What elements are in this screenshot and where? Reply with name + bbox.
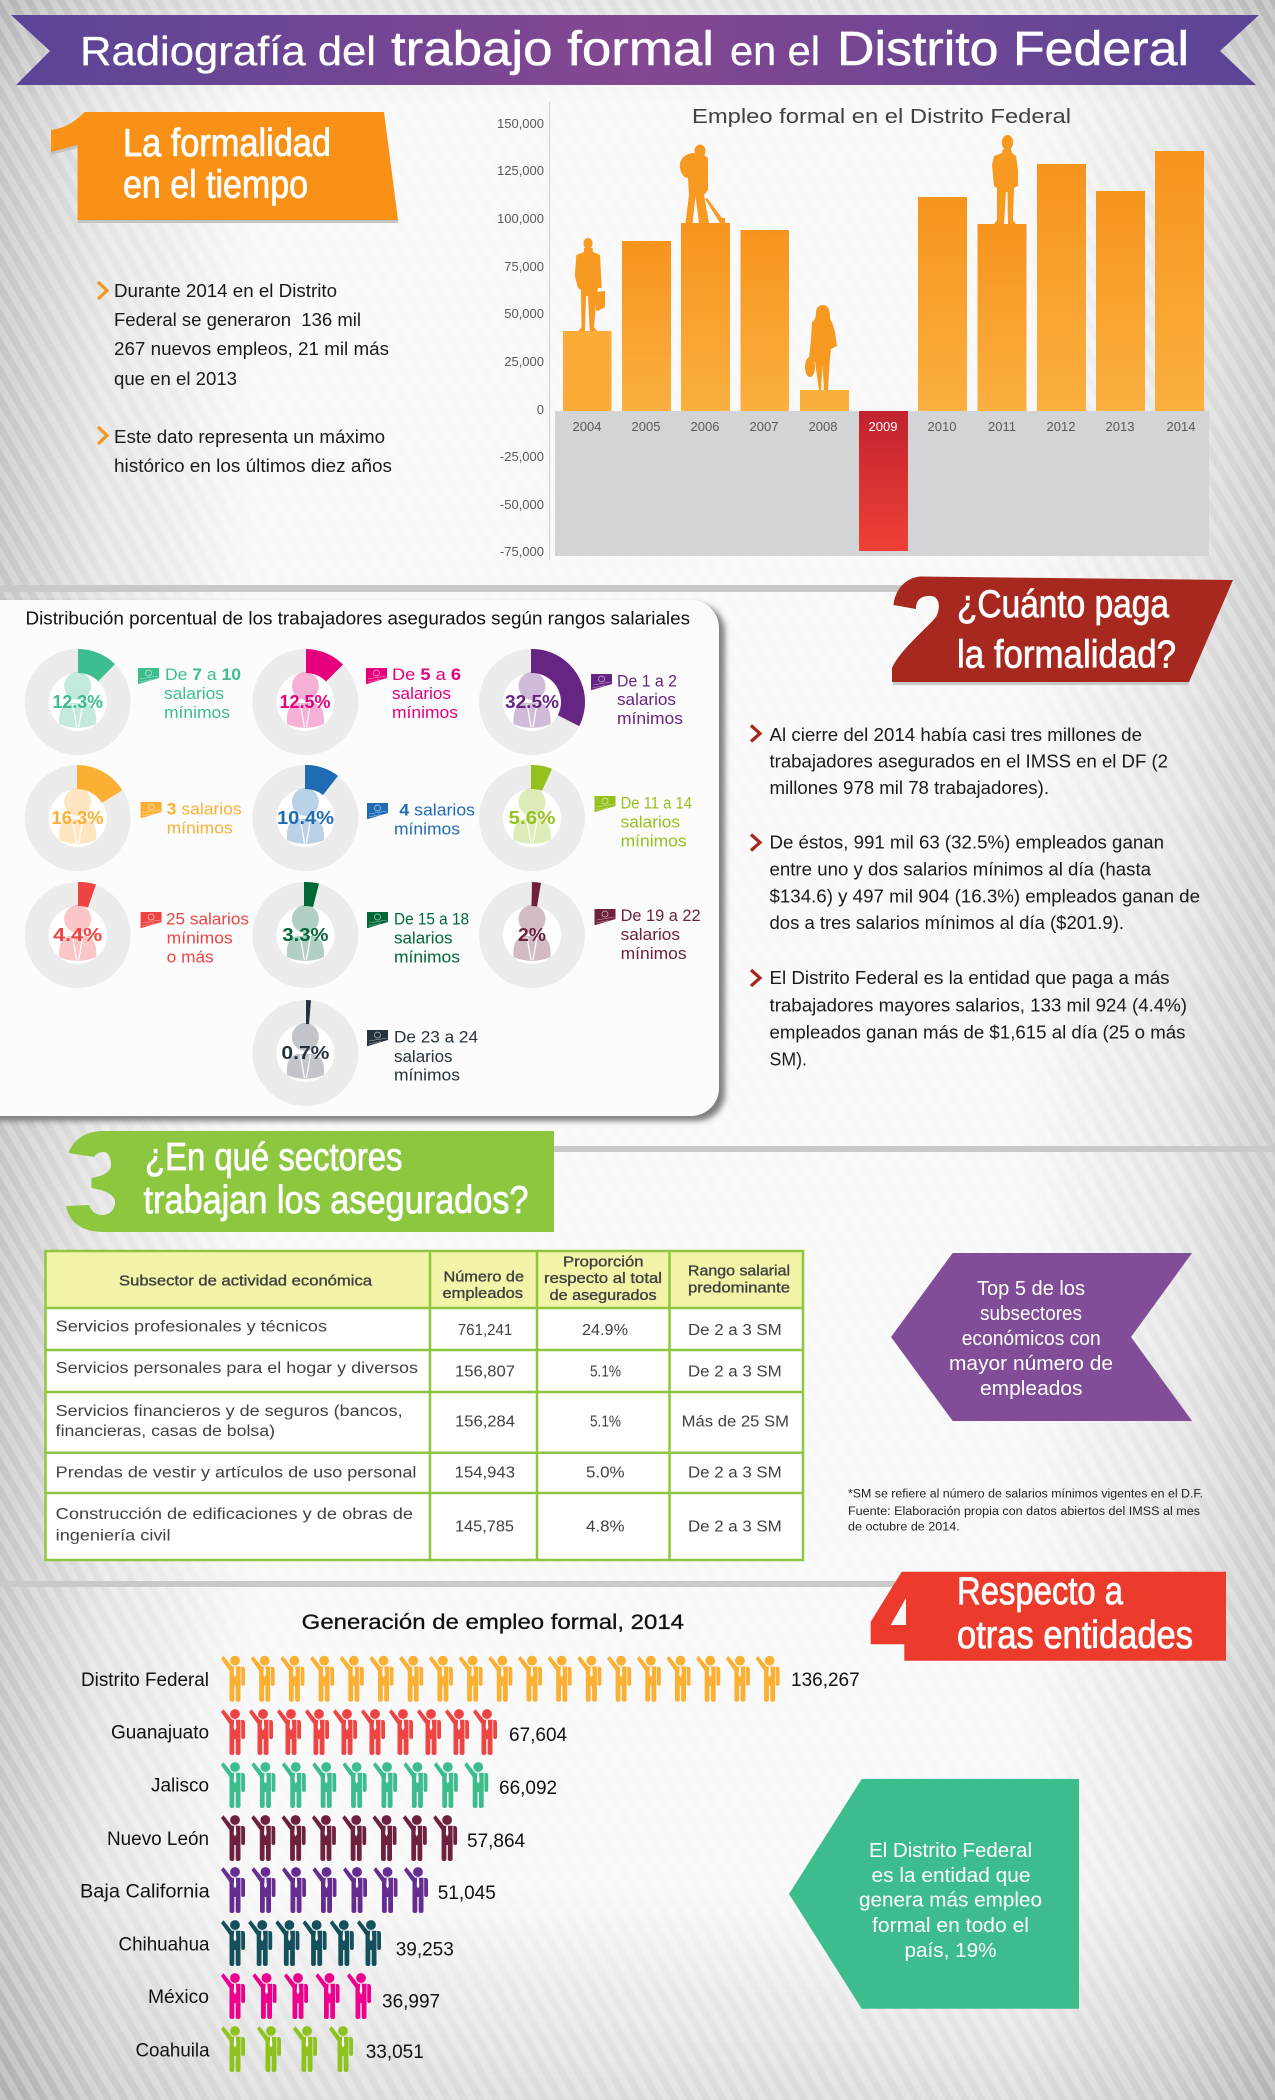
table rows: 5.0% (586, 1465, 625, 1482)
section 3 heading tag: ¿En qué sectores (145, 1136, 402, 1179)
donut: 16.3% 3 salarios (25, 765, 242, 871)
donut: 12.5% de 5 a 6: mínimos (392, 704, 458, 722)
y axis: 25,000 (504, 354, 544, 369)
donut: 10.4% 4 salarios: 4 salarios (399, 802, 475, 820)
table rows: 145,785 (455, 1519, 514, 1536)
row: Coahuila: Coahuila (136, 2041, 210, 2062)
callout: top 5 subsectores: económicos con (962, 1328, 1101, 1350)
title banner: trabajo formal (391, 23, 714, 76)
donut: 2% de 19 a 22: mínimos (621, 945, 687, 963)
section 4 heading tag: otras entidades (957, 1614, 1193, 1657)
table header: respecto al total (544, 1271, 662, 1287)
donut: 0.7% de 23 a 24 (252, 1000, 478, 1106)
section 1 heading tag: en el tiempo (123, 164, 308, 206)
donut: 5.6% de 11 a 14 (479, 765, 692, 871)
donut: 16.3% 3 salarios: mínimos (167, 820, 233, 838)
section 2 heading tag (892, 576, 1233, 685)
icon: young man silhouette (992, 135, 1018, 224)
table header: de asegurados (550, 1288, 657, 1304)
year labels: 2010 (928, 419, 956, 434)
donut: 3.3% de 15 a 18: mínimos (394, 949, 460, 967)
row: Chihuahua: 39,253 (396, 1940, 454, 1961)
y axis: 100,000 (497, 211, 544, 226)
year labels: 2004 (573, 419, 601, 434)
panel: distribución salarial (0, 600, 725, 1121)
donut: 12.3% de 7 a 10: De 7 a 10 (165, 666, 241, 684)
footnote (848, 1489, 1203, 1534)
donut: 12.5% de 5 a 6: De 5 a 6 (392, 666, 461, 684)
table header: empleados (442, 1286, 523, 1302)
table rows: 154,943 (455, 1465, 515, 1482)
title banner: en el (730, 28, 820, 74)
section 2 text block: trabajadores asegurados en el IMSS en el DF (2 (770, 752, 1168, 772)
donut: 4.4% 25 salarios o más: 4.4% (53, 925, 102, 945)
donut: 12.5% de 5 a 6 (252, 649, 461, 755)
divider line: section 3 (550, 1146, 1275, 1152)
donut: 5.6% de 11 a 14: De 11 a 14 (621, 795, 692, 813)
year labels: 2009 (869, 419, 897, 434)
table rows: De 2 a 3 SM (688, 1322, 782, 1339)
donut: 12.3% de 7 a 10: salarios (164, 685, 224, 703)
section 1 text block: Este dato representa un máximo (114, 427, 385, 447)
table rows: De 2 a 3 SM (688, 1465, 782, 1482)
donut: 2% de 19 a 22: salarios (621, 926, 680, 944)
table rows (56, 1319, 789, 1545)
table rows: 5.1% (590, 1364, 621, 1381)
table header (119, 1255, 790, 1304)
row: Chihuahua (118, 1920, 454, 1966)
row: Guanajuato (111, 1709, 568, 1755)
table header: Proporción (563, 1255, 644, 1271)
y axis: -25,000 (500, 449, 544, 464)
donut: 3.3% de 15 a 18: De 15 a 18 (394, 911, 469, 929)
donut: 0.7% de 23 a 24: mínimos (394, 1067, 460, 1085)
callout: top 5 subsectores: empleados (980, 1378, 1082, 1400)
section 2 text block: SM). (770, 1050, 807, 1070)
donut: 3.3% de 15 a 18: salarios (394, 930, 452, 948)
row: Coahuila: 33,051 (366, 2042, 424, 2063)
row: Jalisco: 66,092 (499, 1778, 557, 1799)
donut: 2% de 19 a 22 (479, 882, 701, 988)
y axis: 150,000 (497, 116, 544, 131)
donut: 32.5% de 1 a 2 (479, 649, 683, 755)
year labels: 2008 (809, 419, 837, 434)
chart title: Generación de empleo formal, 2014 (302, 1611, 684, 1634)
row: Nuevo León: 57,864 (467, 1831, 526, 1852)
section 2 text block: Al cierre del 2014 había casi tres millones de (770, 725, 1142, 745)
row: México: México (148, 1987, 209, 2008)
callout: top 5 subsectores (891, 1253, 1192, 1421)
table rows: 24.9% (582, 1322, 628, 1339)
row: Baja California (80, 1867, 496, 1913)
callout: el Distrito Federal genera más empleo: El Distrito Federal (869, 1840, 1032, 1862)
table rows: 761,241 (458, 1322, 512, 1339)
section 1 heading tag (51, 112, 398, 223)
donut: 12.5% de 5 a 6: 12.5% (280, 692, 330, 712)
row: México: 36,997 (382, 1992, 440, 2013)
row: Nuevo León: Nuevo León (107, 1829, 209, 1850)
donut: 32.5% de 1 a 2: mínimos (617, 710, 683, 728)
donut: 12.5% de 5 a 6: salarios (392, 685, 451, 703)
row: Baja California: Baja California (80, 1882, 210, 1903)
callout: el Distrito Federal genera más empleo: formal en todo el (872, 1915, 1029, 1937)
icon: worker with backpack silhouette (680, 144, 725, 223)
callout: el Distrito Federal genera más empleo: país, 19% (904, 1940, 997, 1962)
y axis (497, 102, 550, 560)
table header: Rango salarial (688, 1264, 790, 1280)
table rows: 4.8% (586, 1519, 625, 1536)
donut: 5.6% de 11 a 14: salarios (621, 814, 680, 832)
section 2 text block: entre uno y dos salarios mínimos al día (hasta (770, 860, 1152, 880)
year labels: 2012 (1047, 419, 1075, 434)
year labels: 2014 (1167, 419, 1195, 434)
row: México (148, 1973, 440, 2019)
y axis: -75,000 (500, 544, 544, 559)
callout: top 5 subsectores: Top 5 de los (977, 1278, 1085, 1300)
table rows: 156,807 (455, 1364, 515, 1381)
donut: 3.3% de 15 a 18: 3.3% (282, 925, 328, 945)
section 1 text block: 267 nuevos empleos, 21 mil más (114, 339, 389, 359)
donut: 0.7% de 23 a 24: 0.7% (281, 1043, 329, 1063)
year labels: 2013 (1106, 419, 1134, 434)
row: Nuevo León (107, 1815, 526, 1861)
y axis: 75,000 (504, 259, 544, 274)
table: top 5 subsectores (46, 1251, 803, 1560)
negative area (555, 411, 1209, 556)
table rows: financieras, casas de bolsa) (56, 1423, 275, 1440)
section 1 text block: Durante 2014 en el Distrito (114, 281, 337, 301)
table header: predominante (688, 1281, 790, 1297)
section 2 text block (751, 725, 1200, 1070)
y axis: 50,000 (504, 306, 544, 321)
donut: 2% de 19 a 22: 2% (518, 925, 546, 945)
section 2 text block: trabajadores mayores salarios, 133 mil 924 (4.4%) (770, 996, 1187, 1016)
section 1 heading tag: La formalidad (123, 122, 331, 165)
table rows: Construcción de edificaciones y de obras de (56, 1506, 413, 1523)
donut: 10.4% 4 salarios: mínimos (394, 820, 460, 838)
y axis: 0 (537, 402, 544, 417)
table header: Subsector de actividad económica (119, 1274, 373, 1290)
donut: 12.3% de 7 a 10: mínimos (164, 704, 230, 722)
title banner (11, 15, 1259, 85)
donut: 32.5% de 1 a 2: De 1 a 2 (617, 672, 677, 690)
donut: 0.7% de 23 a 24: De 23 a 24 (394, 1028, 478, 1046)
table rows: Servicios financieros y de seguros (bancos, (56, 1403, 403, 1420)
title banner: Distrito Federal (837, 23, 1189, 76)
donut: 16.3% 3 salarios: 16.3% (52, 808, 104, 828)
table rows: Prendas de vestir y artículos de uso personal (56, 1465, 416, 1482)
section 2 text block: De éstos, 991 mil 63 (32.5%) empleados ganan (770, 832, 1164, 852)
table rows: Servicios personales para el hogar y diversos (56, 1360, 418, 1377)
row: Chihuahua: Chihuahua (118, 1935, 210, 1956)
row: Coahuila (136, 2026, 424, 2072)
donut: 10.4% 4 salarios: 10.4% (277, 808, 334, 828)
callout: el Distrito Federal genera más empleo: genera más empleo (859, 1890, 1042, 1912)
section 2 text block: dos a tres salarios mínimos al día ($201.9). (770, 913, 1124, 933)
table rows: De 2 a 3 SM (688, 1519, 782, 1536)
donut: 32.5% de 1 a 2: 32.5% (505, 692, 559, 712)
footnote: *SM se refiere al número de salarios mínimos vigentes en el D.F. (848, 1489, 1203, 1501)
callout: el Distrito Federal genera más empleo: es la entidad que (872, 1865, 1030, 1887)
chart title: Empleo formal en el Distrito Federal (692, 106, 1071, 128)
section 1 text block (98, 281, 392, 476)
row: Baja California: 51,045 (438, 1883, 496, 1904)
donut: 12.3% de 7 a 10: 12.3% (52, 692, 103, 712)
row: Distrito Federal: Distrito Federal (81, 1670, 209, 1691)
year labels: 2005 (632, 419, 660, 434)
year labels: 2007 (750, 419, 778, 434)
section 1 text block: Federal se generaron 136 mil (114, 310, 361, 330)
callout: el Distrito Federal genera más empleo (789, 1779, 1079, 2009)
row: Distrito Federal: 136,267 (791, 1670, 860, 1691)
y axis: -50,000 (500, 497, 544, 512)
divider line: section 4 (0, 1581, 895, 1587)
icon: woman silhouette (805, 305, 837, 390)
bars (563, 151, 1204, 551)
divider line: section 2 (0, 585, 905, 592)
section 2 text block: empleados ganan más de $1,615 al día (25 o más (770, 1022, 1186, 1042)
donut: 3.3% de 15 a 18 (252, 882, 469, 988)
table rows: Servicios profesionales y técnicos (56, 1319, 327, 1336)
y axis: 125,000 (497, 163, 544, 178)
table header: Número de (444, 1270, 524, 1286)
donut: 0.7% de 23 a 24: salarios (394, 1048, 452, 1066)
row: Jalisco (151, 1762, 557, 1808)
row: Guanajuato: 67,604 (509, 1725, 568, 1746)
donut: 4.4% 25 salarios o más: mínimos (167, 930, 233, 948)
callout: top 5 subsectores: mayor número de (949, 1353, 1113, 1375)
pictogram chart: generación de empleo formal (80, 1611, 860, 2072)
footnote: de octubre de 2014. (848, 1522, 960, 1534)
section 1 text block: que en el 2013 (114, 369, 237, 389)
table rows: De 2 a 3 SM (688, 1364, 782, 1381)
table rows: ingeniería civil (56, 1528, 171, 1545)
donut: 5.6% de 11 a 14: 5.6% (508, 808, 556, 828)
section 3 heading tag (66, 1131, 554, 1232)
panel heading: Distribución porcentual de los trabajadores asegurados según rangos salariales (26, 608, 690, 628)
section 1 text block: histórico en los últimos diez años (114, 456, 392, 476)
section 2 heading tag: ¿Cuánto paga (957, 583, 1169, 626)
table rows: Más de 25 SM (682, 1414, 789, 1431)
donut: 2% de 19 a 22: De 19 a 22 (621, 907, 701, 925)
year labels: 2011 (988, 419, 1016, 434)
donut: 5.6% de 11 a 14: mínimos (621, 832, 687, 850)
icon: businessman silhouette (575, 238, 605, 331)
donut: 4.4% 25 salarios o más (25, 882, 249, 988)
table rows: 156,284 (455, 1414, 515, 1431)
callout: top 5 subsectores: subsectores (980, 1303, 1082, 1325)
donut: 32.5% de 1 a 2: salarios (617, 691, 676, 709)
table rows: 5.1% (590, 1414, 621, 1431)
section 2 text block: $134.6) y 497 mil 904 (16.3%) empleados ganan de (770, 886, 1200, 906)
donut: 4.4% 25 salarios o más: o más (167, 949, 214, 967)
donut: 10.4% 4 salarios (252, 765, 475, 871)
section 4 heading tag: Respecto a (957, 1570, 1123, 1613)
row: Jalisco: Jalisco (151, 1776, 209, 1797)
section 2 text block: millones 978 mil 78 trabajadores). (770, 778, 1049, 798)
bar chart: empleo formal (497, 102, 1209, 560)
year labels: 2006 (691, 419, 719, 434)
donut: 16.3% 3 salarios: 3 salarios (167, 800, 242, 818)
section 2 heading tag: la formalidad? (957, 634, 1176, 676)
section 3 heading tag: trabajan los asegurados? (144, 1179, 528, 1222)
row: Distrito Federal (81, 1656, 860, 1702)
title banner: Radiografía del (80, 28, 376, 74)
section 4 heading tag (871, 1570, 1226, 1661)
donut: 12.3% de 7 a 10 (25, 649, 241, 755)
row: Guanajuato: Guanajuato (111, 1723, 209, 1744)
year labels (573, 419, 1195, 434)
donut: 4.4% 25 salarios o más: 25 salarios (166, 911, 249, 929)
section 2 text block: El Distrito Federal es la entidad que paga a más (770, 968, 1170, 988)
footnote: Fuente: Elaboración propia con datos abiertos del IMSS al mes (848, 1506, 1200, 1518)
